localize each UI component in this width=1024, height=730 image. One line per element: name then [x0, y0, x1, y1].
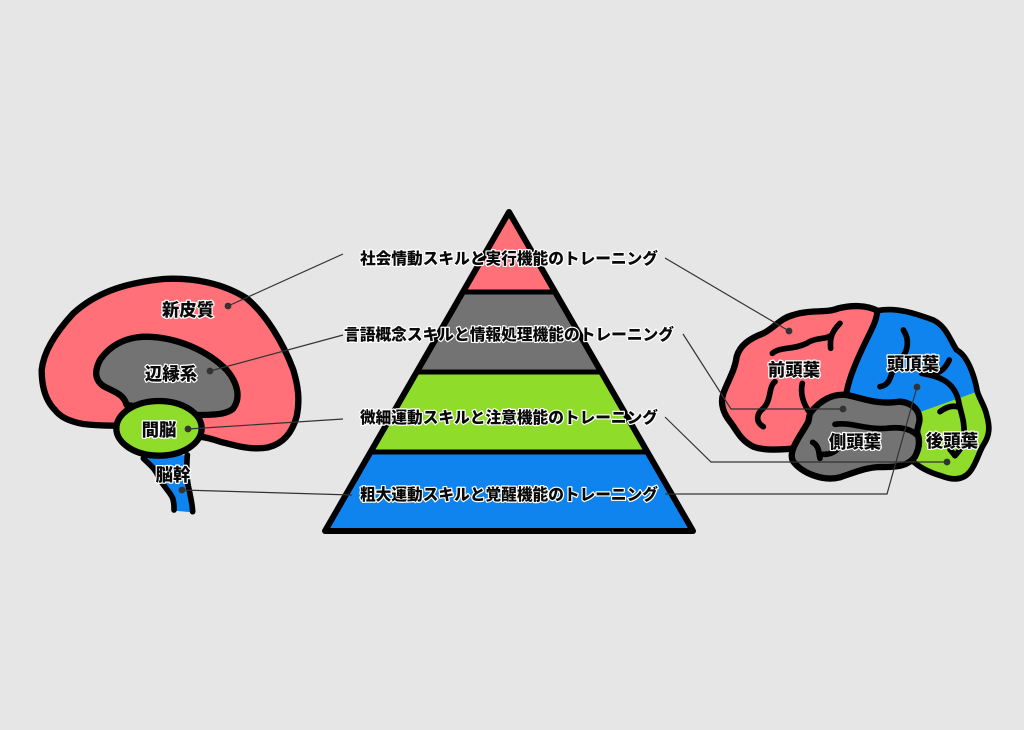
region: neocortex — [42, 279, 298, 448]
label: parietal lobe: 頭頂葉 — [887, 354, 940, 374]
connector: limbic system — [207, 335, 343, 374]
tier: fine motor and attention — [371, 372, 648, 452]
label: language and information training: 言語概念スキルと情報処理機能のトレーニング — [344, 325, 674, 344]
lobe: parietal — [847, 310, 977, 413]
connector: diencephalon — [185, 419, 343, 432]
label: diencephalon: 間脳 — [142, 420, 177, 440]
connector: brainstem — [179, 487, 352, 495]
diagram: brain lateral lobes — [722, 306, 989, 479]
diagram: training pyramid — [325, 212, 693, 531]
connector: parietal lobe — [665, 384, 920, 494]
region: diencephalon — [116, 401, 202, 456]
label: gross motor and arousal training: 粗大運動スキルと覚醒機能のトレーニング — [360, 485, 658, 504]
label: social and executive training: 社会情動スキルと実行機能のトレーニング — [360, 249, 658, 268]
label: limbic system: 辺縁系 — [145, 364, 198, 384]
label: brainstem: 脳幹 — [156, 465, 191, 485]
label: frontal lobe: 前頭葉 — [768, 360, 821, 380]
tier: gross motor and arousal — [325, 452, 693, 531]
label: neocortex: 新皮質 — [162, 300, 214, 320]
connector: occipital lobe — [665, 417, 950, 465]
lobe: occipital — [912, 392, 989, 479]
sulci — [758, 323, 964, 456]
label: fine motor and attention training: 微細運動スキルと注意機能のトレーニング — [360, 408, 658, 427]
region: brainstem — [143, 455, 193, 512]
connector: frontal lobe — [665, 258, 792, 334]
tier: language and cognition — [416, 292, 602, 372]
region: limbic system — [96, 337, 238, 415]
connector: neocortex — [225, 254, 343, 309]
lobe: frontal — [722, 306, 877, 450]
tier: social and executive — [462, 212, 556, 292]
connector: temporal lobe — [683, 334, 846, 412]
diagram: brain cross-section — [42, 279, 298, 512]
label: temporal lobe: 側頭葉 — [829, 432, 882, 452]
lobe: temporal — [792, 395, 919, 478]
sulci: temporal — [813, 424, 917, 458]
label: occipital lobe: 後頭葉 — [926, 431, 979, 451]
